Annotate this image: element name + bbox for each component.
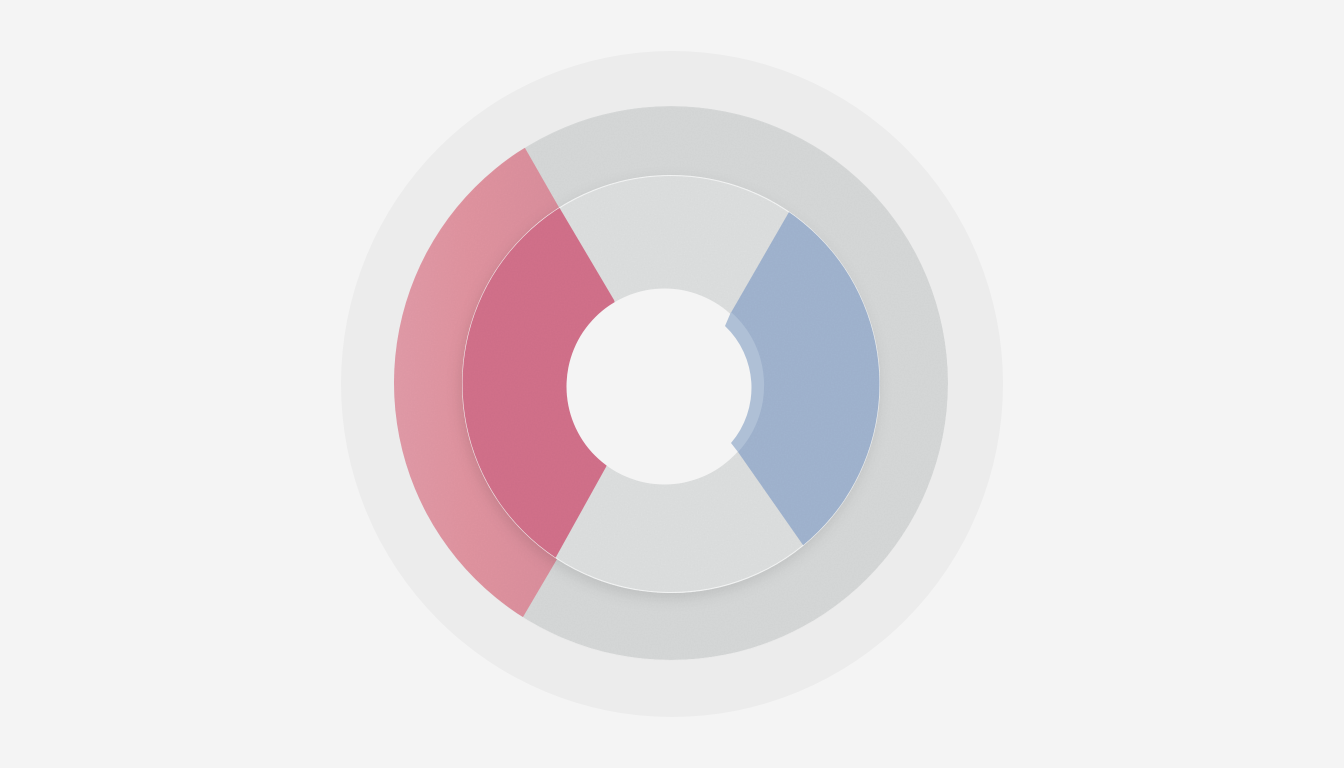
inner disc: blue sector	[731, 212, 880, 546]
middle ring: red sector	[394, 148, 559, 617]
middle ring: gray base	[523, 106, 948, 660]
outer pale ring	[341, 51, 1003, 717]
blue highlight arc band	[725, 312, 764, 452]
concentric ring diagram	[394, 106, 948, 661]
inner disc: sectors	[462, 208, 880, 558]
texture overlay	[394, 107, 948, 661]
inner disc: light gray base	[462, 176, 880, 592]
inner disc	[440, 170, 900, 600]
center hole	[566, 288, 762, 484]
inner disc: red sector	[462, 208, 615, 558]
middle ring	[394, 106, 948, 660]
